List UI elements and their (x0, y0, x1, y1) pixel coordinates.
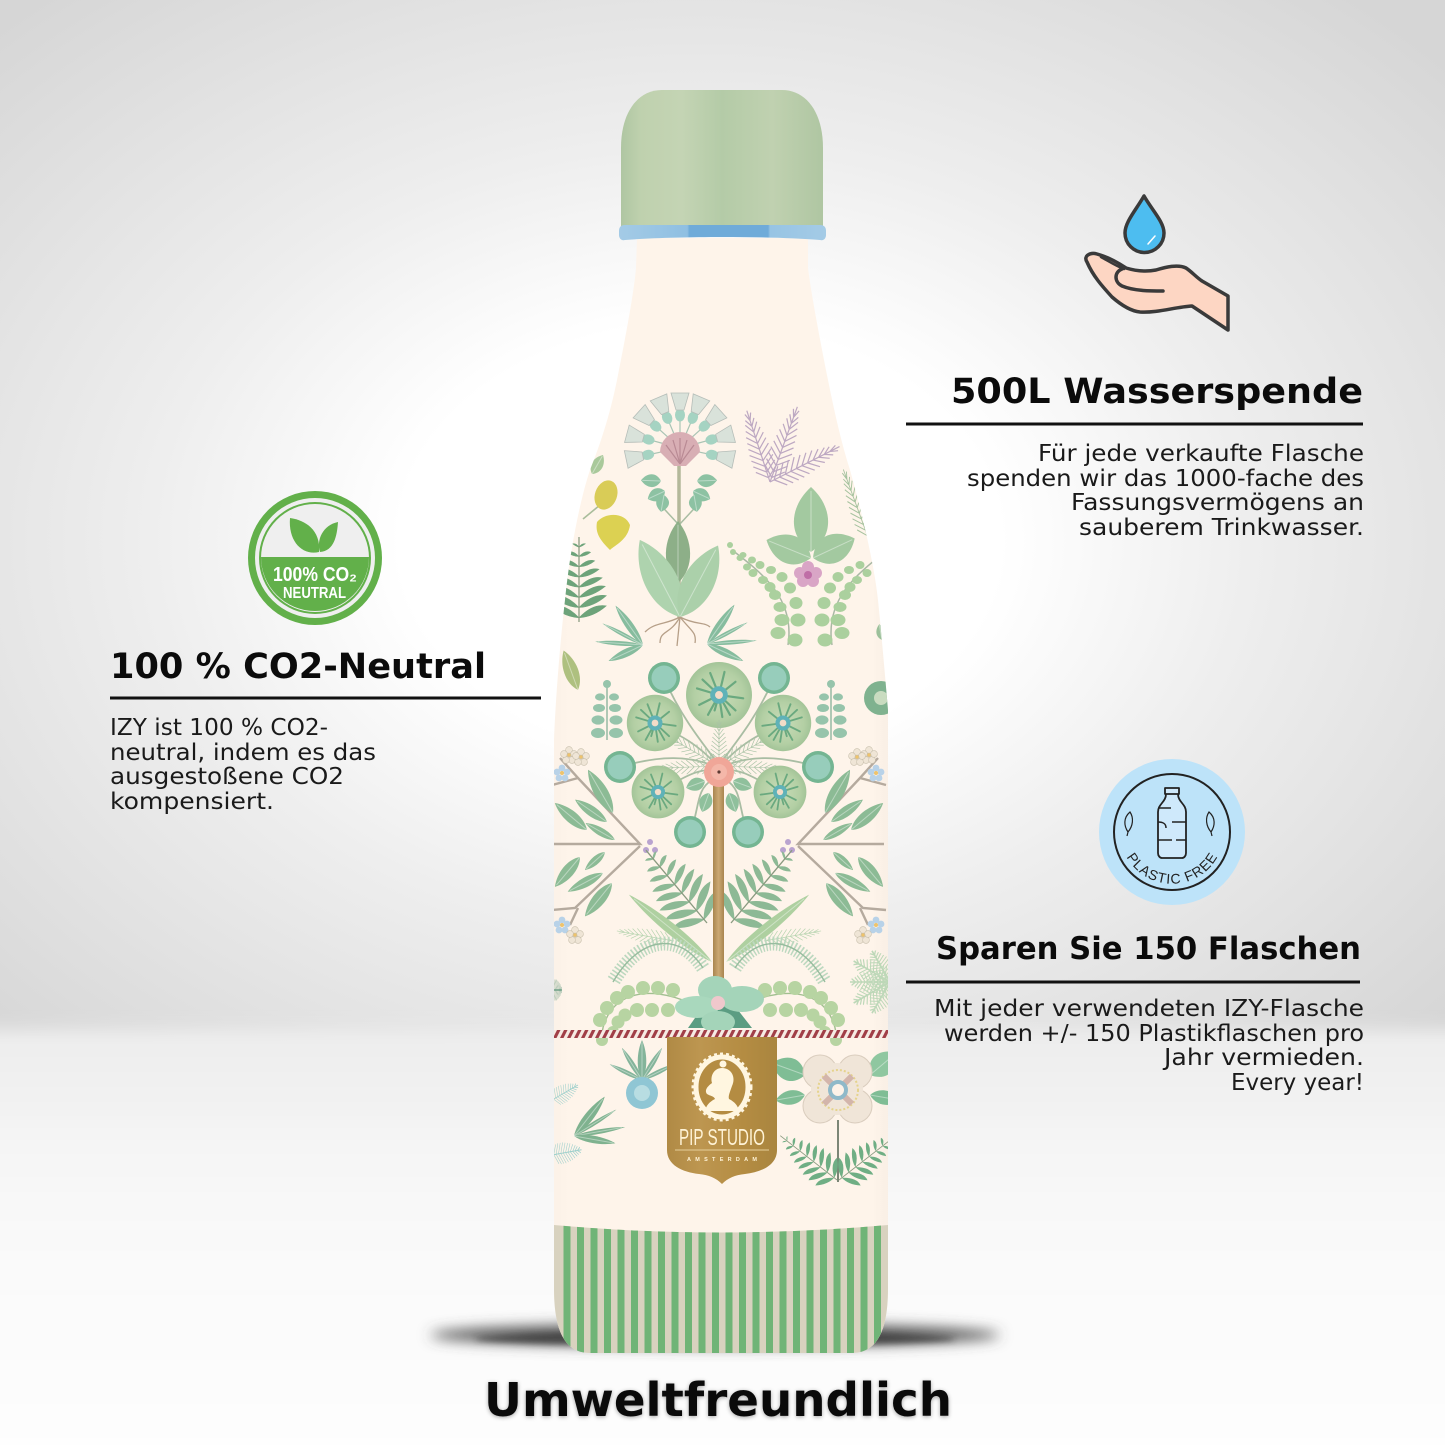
body text: Mit jeder verwendeten IZY-Flasche (934, 996, 1364, 1022)
body text: ausgestoßene CO2 (110, 764, 344, 790)
botanical: yellow tulips and left fern (552, 452, 886, 692)
floor shadow (430, 1324, 1000, 1346)
base flower (675, 976, 764, 1033)
bottom title: Umweltfreundlich (484, 1373, 952, 1427)
heading: 100 % CO2-Neutral (110, 647, 486, 687)
heading: Sparen Sie 150 Flaschen (936, 931, 1361, 967)
bottle body (548, 236, 907, 1360)
body text: neutral, indem es das (110, 740, 376, 766)
body text: werden +/- 150 Plastikflaschen pro (944, 1021, 1364, 1047)
icon: CO2 neutral badge: NEUTRAL (283, 585, 346, 602)
cap ring (619, 225, 826, 240)
body text: IZY ist 100 % CO2- (110, 715, 328, 741)
icon: plastic free badge (1099, 759, 1245, 905)
tree side branches, right (709, 662, 888, 1046)
tree side branches, left (550, 662, 729, 1046)
cameo logo (693, 1054, 751, 1120)
body text (934, 996, 1364, 1096)
gold brand label (667, 1037, 777, 1184)
tree trunk (713, 782, 724, 980)
salmon flower (704, 757, 734, 787)
body text (110, 715, 376, 815)
botanical: purple fern (744, 406, 840, 486)
section: 100 % CO2-Neutral (110, 491, 541, 815)
botanical: pineapple (610, 1040, 667, 1109)
botanical: central tree (550, 662, 888, 1046)
botanical: base leaves and roots (595, 521, 757, 665)
botanical: small sprig (574, 1096, 625, 1144)
icon: plastic free badge: PLASTIC FREE (1127, 852, 1218, 884)
icon: CO2 neutral badge (248, 491, 382, 625)
heading: 500L Wasserspende (951, 372, 1363, 412)
stripes at bottle base (554, 1220, 888, 1360)
icon: CO2 neutral badge: 100% CO₂ (273, 564, 357, 586)
tree top pad (686, 662, 752, 728)
botanical: three-leaf sprig with pink flower (766, 487, 855, 587)
body text: Fassungsvermögens an (1071, 490, 1364, 516)
botanical: round-leaf vines (727, 542, 888, 646)
icon: water drop over hand (1086, 196, 1228, 330)
botanical: edge details (548, 681, 900, 1165)
section: Sparen Sie 150 Flaschen (906, 759, 1364, 1096)
body text (967, 441, 1364, 541)
botanical: shell flower (624, 393, 736, 618)
body text: Für jede verkaufte Flasche (1038, 441, 1364, 467)
body text: spenden wir das 1000-fache des (967, 466, 1364, 492)
bottle cap (621, 90, 823, 230)
botanical: large pale flower (777, 1052, 888, 1186)
body text: kompensiert. (110, 789, 274, 815)
section: 500L Wasserspende (906, 196, 1364, 541)
tree crown plume (710, 725, 728, 758)
body text: sauberem Trinkwasser. (1079, 515, 1364, 541)
body text: Jahr vermieden. (1162, 1045, 1364, 1071)
bottle (548, 90, 907, 1360)
body text: Every year! (1231, 1070, 1364, 1096)
twisted ribbon band (554, 1030, 888, 1038)
brand name: PIP STUDIO (679, 1124, 765, 1150)
brand location: AMSTERDAM (687, 1157, 757, 1163)
